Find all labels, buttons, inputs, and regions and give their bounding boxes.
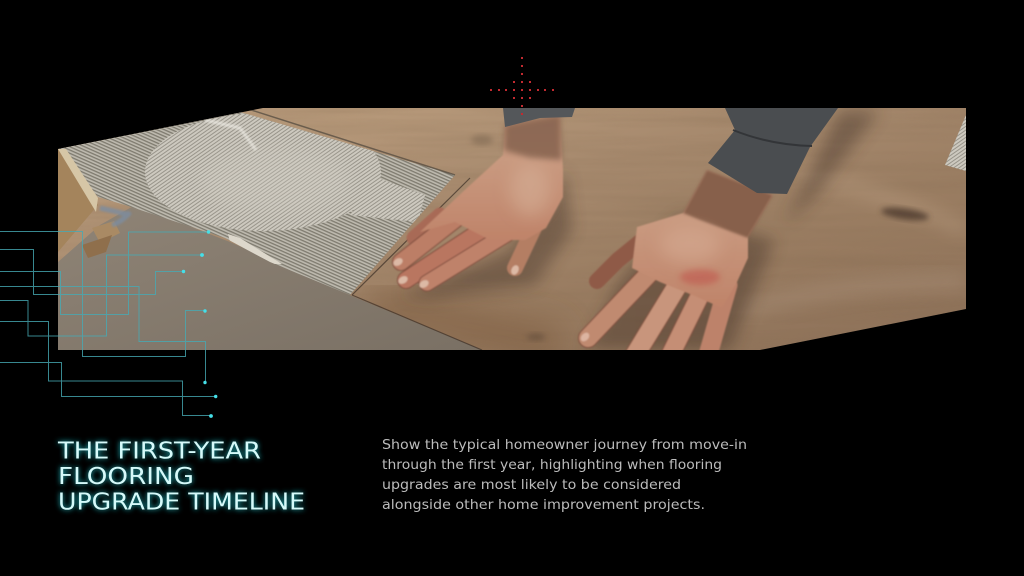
description text: Show the typical homeowner journey from move-in xyxy=(382,437,747,453)
red dotted cross decoration xyxy=(490,57,554,115)
adhesive trowel area xyxy=(58,108,458,298)
hand shadows xyxy=(400,110,880,350)
description text: alongside other home improvement projects. xyxy=(382,497,705,513)
circuit lines decoration xyxy=(0,232,216,416)
description text: through the first year, highlighting when flooring xyxy=(382,457,722,473)
left sleeve xyxy=(503,108,575,127)
plank edge xyxy=(352,178,482,350)
adhesive patch top right xyxy=(945,115,966,171)
wall corner and broken tile xyxy=(58,149,130,258)
description text xyxy=(382,437,747,513)
title with cyan glow: UPGRADE TIMELINE xyxy=(58,488,305,516)
title with cyan glow: UPGRADE TIMELINE xyxy=(58,488,305,516)
right sleeve xyxy=(708,108,838,194)
right hand xyxy=(579,170,773,362)
title with cyan glow: FLOORING xyxy=(58,462,194,490)
circuit end dots xyxy=(182,230,217,418)
wood floor xyxy=(58,108,966,350)
title with cyan glow xyxy=(57,436,305,516)
description text: upgrades are most likely to be considered xyxy=(382,477,681,493)
left hand xyxy=(392,115,563,290)
title with cyan glow: FLOORING xyxy=(58,462,194,490)
upper plank edge shadow xyxy=(245,108,455,175)
wood knots xyxy=(471,135,930,340)
title with cyan glow: THE FIRST-YEAR xyxy=(57,436,261,464)
title with cyan glow: THE FIRST-YEAR xyxy=(57,436,261,464)
photo: hands laying vinyl wood flooring xyxy=(58,108,966,362)
concrete subfloor xyxy=(58,205,482,350)
